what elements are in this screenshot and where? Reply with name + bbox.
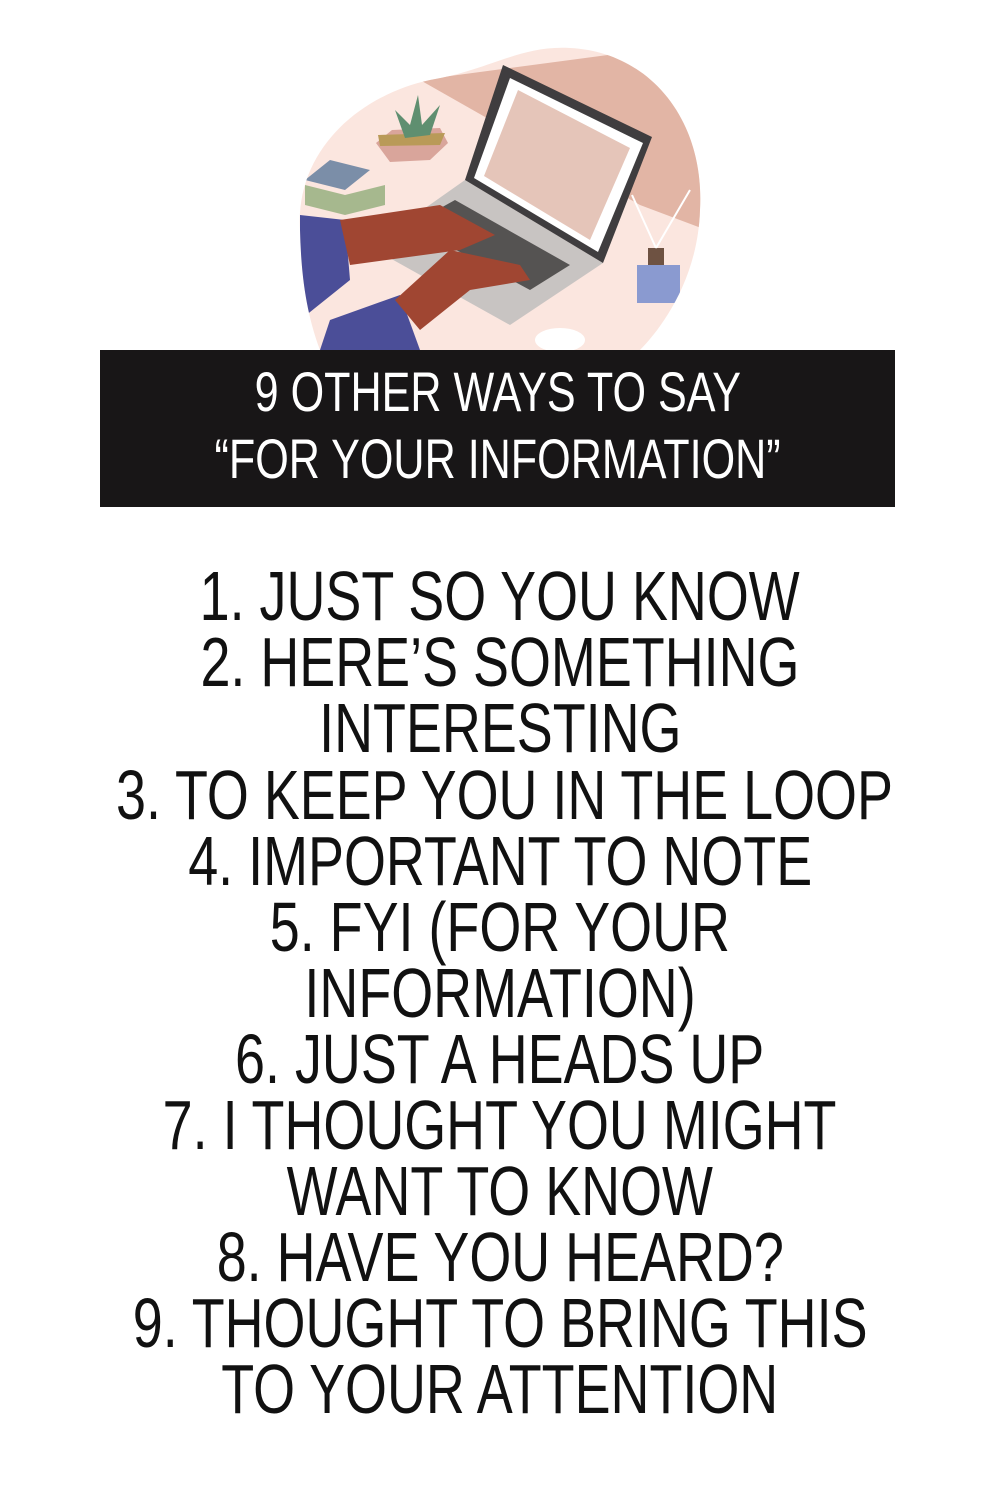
- title banner: “FOR YOUR INFORMATION”: [214, 427, 781, 490]
- list of phrases: 8. HAVE YOU HEARD?: [216, 1218, 784, 1296]
- illustration: laptop on desk: [300, 48, 700, 350]
- list of phrases: 3. TO KEEP YOU IN THE LOOP: [116, 756, 893, 834]
- books: [305, 160, 385, 215]
- list of phrases: 7. I THOUGHT YOU MIGHT: [163, 1086, 837, 1164]
- list of phrases: WANT TO KNOW: [287, 1152, 713, 1230]
- list of phrases: 6. JUST A HEADS UP: [235, 1020, 765, 1098]
- list of phrases: INFORMATION): [304, 954, 696, 1032]
- list of phrases: 1. JUST SO YOU KNOW: [200, 557, 800, 635]
- list of phrases: 4. IMPORTANT TO NOTE: [188, 822, 812, 900]
- list of phrases: 5. FYI (FOR YOUR: [270, 888, 730, 966]
- plant: [376, 95, 448, 162]
- laptop screen: [465, 65, 652, 263]
- laptop base: [370, 180, 603, 325]
- title banner: 9 OTHER WAYS TO SAY: [254, 360, 741, 423]
- hands: [340, 205, 495, 265]
- list of phrases: TO YOUR ATTENTION: [221, 1350, 779, 1428]
- list of phrases: 9. THOUGHT TO BRING THIS: [133, 1284, 867, 1362]
- diffuser: [632, 190, 690, 303]
- arm sleeve: [300, 215, 350, 320]
- title banner: [100, 350, 895, 507]
- list of phrases: 2. HERE’S SOMETHING: [201, 623, 799, 701]
- list of phrases: INTERESTING: [319, 689, 681, 767]
